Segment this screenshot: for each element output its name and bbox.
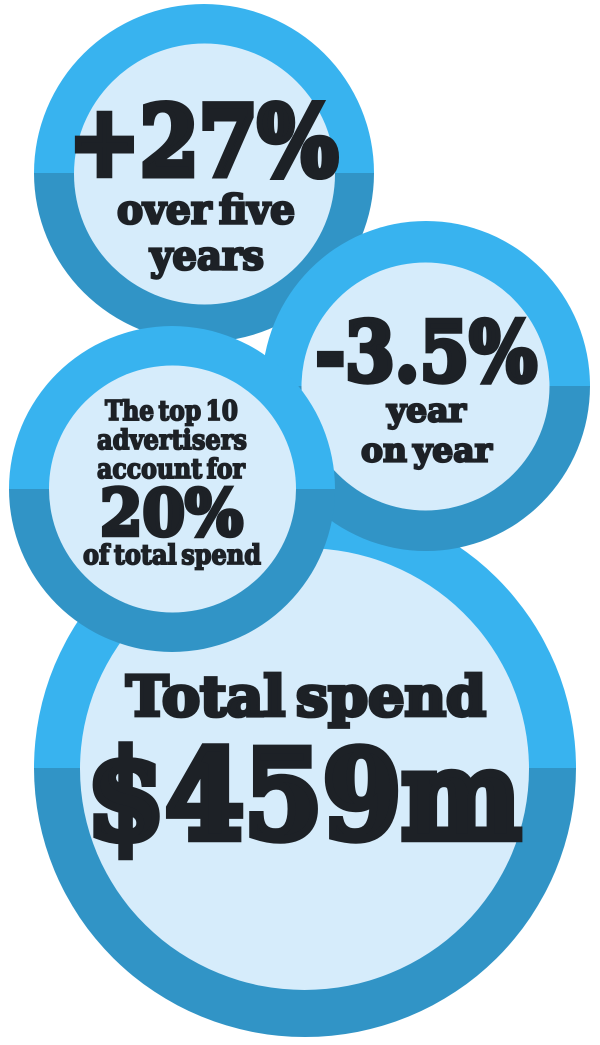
panel: total spend circle — [34, 499, 576, 1037]
text: the top 10 advertisers account for: advertisers — [97, 425, 247, 456]
panel: five year growth circle — [34, 4, 374, 342]
text: the top 10 advertisers account for: account for — [97, 454, 246, 485]
text: of total spend: of total spend — [83, 540, 261, 571]
text: over five years — [117, 186, 295, 280]
heading: total spend: Total spend — [126, 664, 486, 728]
figure: -3.5%: -3.5% — [316, 305, 537, 401]
text: year on year — [361, 390, 493, 470]
text: year on year: year — [386, 390, 467, 430]
figure: $459m: $459m — [86, 723, 521, 867]
figure: 20%: 20% — [100, 476, 243, 551]
panel: year on year circle — [262, 221, 590, 551]
figure: +27%: +27% — [69, 85, 338, 198]
text: over five years: years — [149, 232, 264, 280]
text: the top 10 advertisers account for — [97, 396, 247, 485]
text: the top 10 advertisers account for: The top 10 — [105, 396, 238, 427]
text: year on year: on year — [361, 430, 493, 470]
text: over five years: over five — [117, 186, 295, 234]
panel: top 10 advertisers circle — [9, 326, 335, 652]
